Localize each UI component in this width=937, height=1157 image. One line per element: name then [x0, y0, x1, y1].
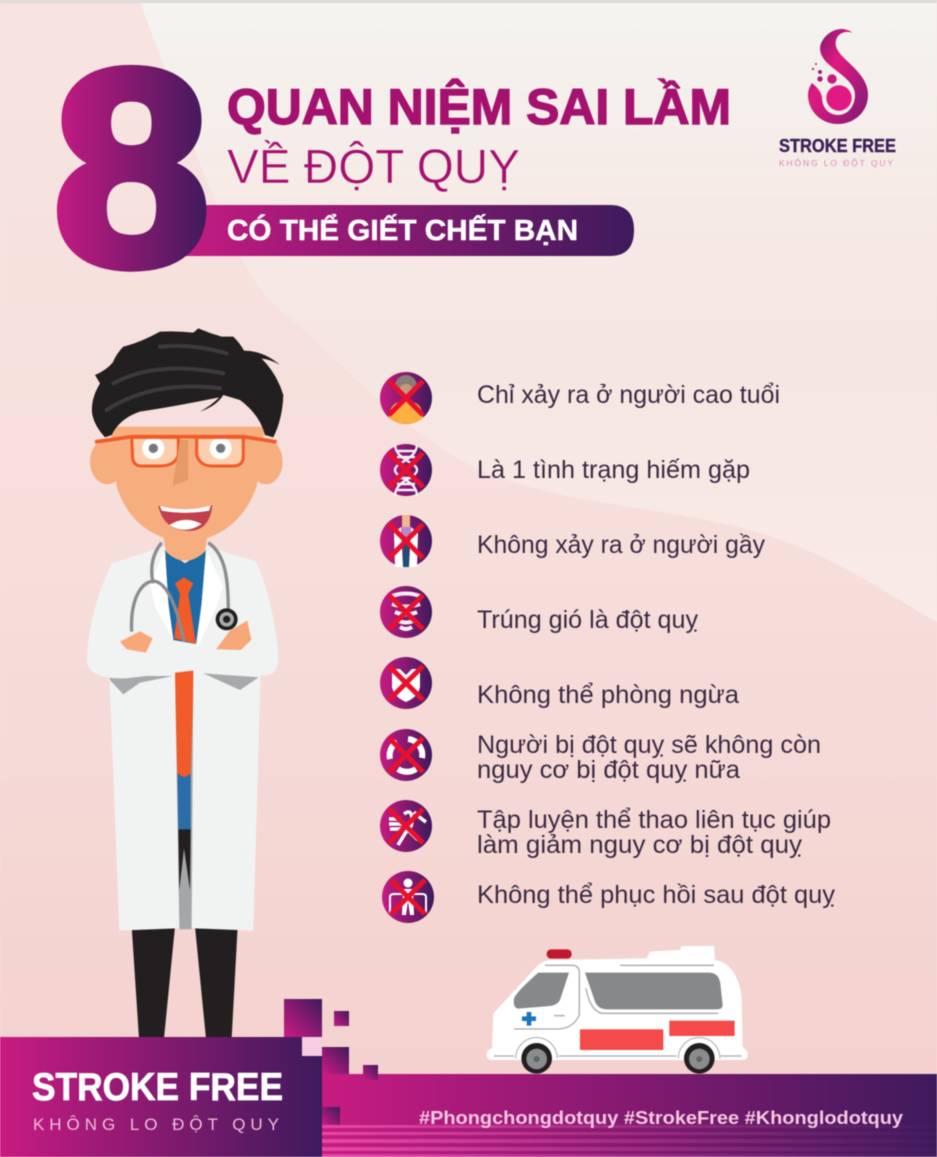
item 7	[477, 806, 831, 859]
footer	[0, 999, 937, 1157]
ambulance	[487, 946, 748, 1074]
torso and arms	[87, 537, 278, 678]
item 2: Là 1 tình trạng hiếm gặp	[477, 456, 750, 484]
face	[110, 427, 265, 542]
list of misconceptions	[477, 381, 835, 909]
item 7: làm giảm nguy cơ bị đột quỵ	[477, 831, 803, 859]
mouth	[158, 505, 212, 531]
neck	[163, 537, 207, 561]
front wheel	[516, 1037, 557, 1074]
side window	[585, 973, 723, 1009]
heading line 1: QUAN NIỆM SAI LẦM	[227, 79, 731, 135]
windshield	[514, 973, 569, 1009]
icon 3: thin person crossed	[380, 515, 432, 567]
item 7: Tập luyện thể thao liên tục giúp	[477, 806, 831, 834]
icon 6: recurring arrows crossed	[380, 729, 432, 781]
item 6: Người bị đột quỵ sẽ không còn	[477, 731, 821, 759]
hashtags: #Phongchongdotquy #StrokeFree #Khonglodotquy	[419, 1108, 903, 1128]
item 1: Chỉ xảy ra ở người cao tuổi	[477, 381, 780, 409]
icon 8: rehabilitation crossed	[382, 871, 434, 923]
footer brand name: STROKE FREE	[32, 1066, 283, 1109]
footer tagline: KHÔNG LO ĐỘT QUY	[33, 1115, 279, 1134]
item 8: Không thể phục hồi sau đột quỵ	[477, 881, 835, 909]
footer left panel	[0, 1037, 322, 1157]
logo mark	[808, 29, 868, 124]
doctor illustration	[87, 328, 283, 1038]
decorative squares	[284, 999, 378, 1125]
icon 1: elderly person crossed	[380, 372, 432, 424]
hair	[92, 328, 283, 437]
body lines	[494, 965, 742, 1056]
siren	[547, 949, 572, 959]
banner text: CÓ THỂ GIẾT CHẾT BẠN	[227, 213, 578, 247]
item 6: nguy cơ bị đột quỵ nữa	[477, 756, 740, 784]
icon 4: tornado crossed	[380, 586, 432, 638]
logo: Stroke Free	[779, 29, 896, 168]
icon 2: DNA crossed	[380, 444, 432, 496]
stethoscope chest piece	[216, 608, 238, 630]
icon 7: runner crossed	[380, 800, 432, 852]
ears	[90, 439, 125, 484]
shirt	[165, 550, 206, 644]
item 4: Trúng gió là đột quỵ	[477, 606, 698, 634]
logo tagline: KHÔNG LO ĐỘT QUY	[779, 158, 893, 168]
title block	[53, 12, 731, 323]
item 5: Không thể phòng ngừa	[477, 681, 739, 709]
pill banner	[170, 205, 634, 256]
footer band	[322, 1074, 937, 1157]
nose	[173, 440, 188, 486]
heading line 2: VỀ ĐỘT QUỴ	[227, 140, 520, 194]
icon 5: shield crossed	[380, 657, 432, 709]
head	[90, 328, 283, 542]
rear wheel	[678, 1037, 720, 1074]
hair highlights	[107, 346, 227, 410]
big number 8: 8	[53, 12, 210, 323]
blue cross	[522, 1012, 536, 1026]
logo name: STROKE FREE	[779, 136, 896, 156]
red stripes	[580, 1021, 735, 1050]
hands	[120, 631, 153, 653]
legs	[132, 927, 238, 1038]
item 3: Không xảy ra ở người gầy	[477, 531, 765, 559]
stethoscope	[132, 543, 228, 642]
icon list	[380, 372, 434, 923]
item 6	[477, 731, 821, 784]
tie	[174, 577, 196, 644]
glasses	[95, 437, 277, 467]
lab coat lower	[109, 670, 261, 931]
coat lapels	[150, 550, 223, 648]
body	[487, 946, 748, 1060]
light square	[302, 1037, 322, 1056]
